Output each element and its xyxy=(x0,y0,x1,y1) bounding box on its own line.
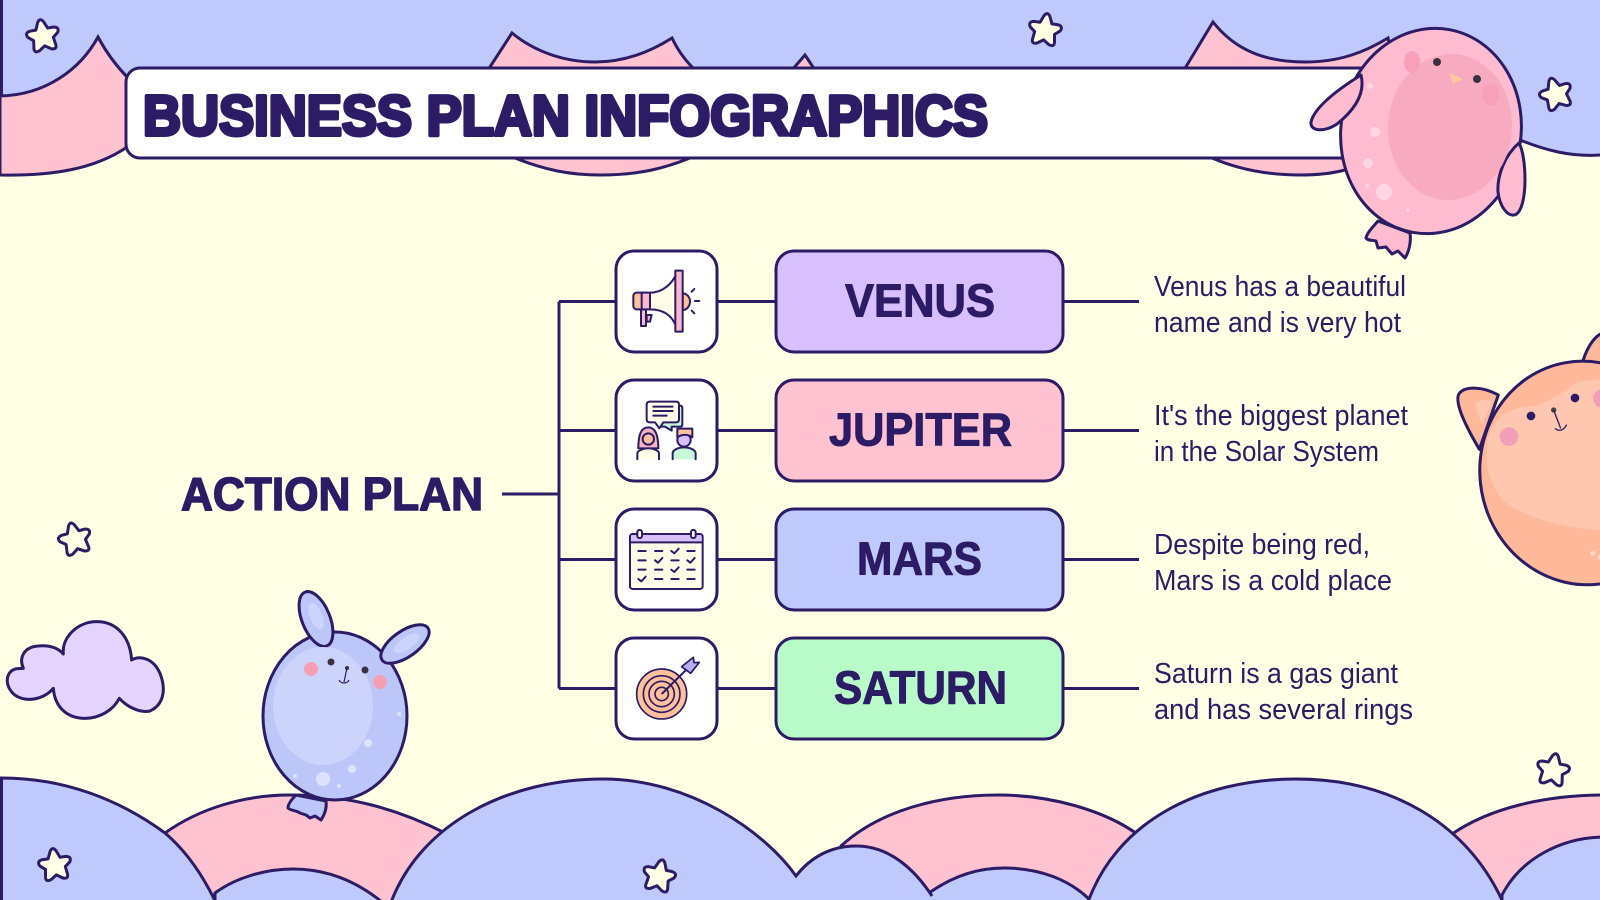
description: saturn xyxy=(1154,658,1413,726)
label: venus: VENUS xyxy=(845,274,995,326)
description: venus: name and is very hot xyxy=(1154,307,1401,339)
label: venus xyxy=(776,251,1063,352)
label: mars: MARS xyxy=(857,532,982,584)
bottom scenery: hills xyxy=(2,778,1600,900)
description: mars: Despite being red, xyxy=(1154,529,1370,561)
description: venus: Venus has a beautiful xyxy=(1154,271,1406,303)
description: mars xyxy=(1154,529,1392,597)
description: jupiter: in the Solar System xyxy=(1154,436,1379,468)
description: venus xyxy=(1154,271,1406,339)
icon box: people talking xyxy=(616,380,717,481)
heading: action plan: ACTION PLAN xyxy=(181,468,483,520)
title: BUSINESS PLAN INFOGRAPHICS xyxy=(143,84,988,148)
description: mars: Mars is a cold place xyxy=(1154,565,1392,597)
description: saturn: and has several rings xyxy=(1154,694,1413,726)
description: jupiter xyxy=(1154,400,1408,468)
label: jupiter xyxy=(776,380,1063,481)
label: saturn xyxy=(776,638,1063,739)
description: jupiter: It's the biggest planet xyxy=(1154,400,1408,432)
rabbit character xyxy=(263,587,435,820)
description: saturn: Saturn is a gas giant xyxy=(1154,658,1398,690)
label: mars xyxy=(776,509,1063,610)
cloud xyxy=(7,622,163,718)
title banner xyxy=(126,68,1426,158)
diagram connectors xyxy=(502,302,1139,688)
label: jupiter: JUPITER xyxy=(829,404,1012,456)
top scenery: sky and pink hills xyxy=(0,0,1600,175)
icon box: target xyxy=(616,638,717,739)
icon box: megaphone xyxy=(616,251,717,352)
label: saturn: SATURN xyxy=(834,662,1007,714)
cat character xyxy=(1458,333,1600,602)
icon box: calendar xyxy=(616,509,717,610)
bird character xyxy=(1311,14,1538,258)
